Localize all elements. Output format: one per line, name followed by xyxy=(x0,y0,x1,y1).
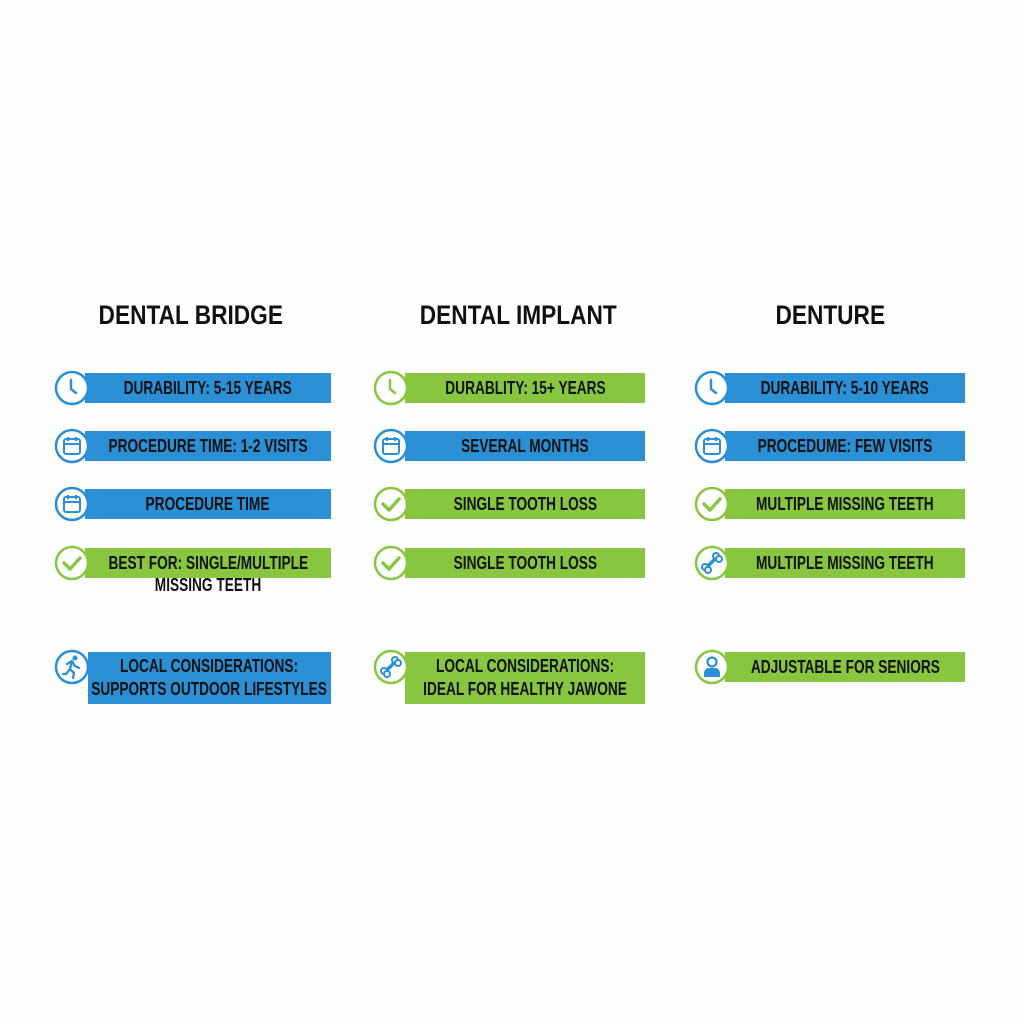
icon: calendar xyxy=(54,428,87,464)
column 3 item: multiple missing teeth xyxy=(694,486,965,522)
icon: check xyxy=(694,486,727,522)
column 1 item: best for: MISSING TEETH xyxy=(155,575,261,595)
column 1 item: procedure time: PROCEDURE TIME xyxy=(146,494,270,514)
icon: bone xyxy=(374,650,406,684)
column 1 item: best for: BEST FOR: SINGLE/MULTIPLE xyxy=(108,552,308,572)
icon: calendar xyxy=(374,428,406,464)
column 2 item: durability xyxy=(374,370,645,406)
column 3 item: procedure xyxy=(694,428,965,464)
icon: bone xyxy=(694,546,727,580)
column 3 item: durability: DURABILITY: 5-10 YEARS xyxy=(761,378,929,398)
column 2 item: single tooth loss 2: SINGLE TOOTH LOSS xyxy=(453,552,597,572)
column 2 item: single tooth loss xyxy=(374,486,645,522)
column 1 item: procedure time xyxy=(54,486,331,522)
icon: person xyxy=(694,650,727,684)
icon: runner xyxy=(54,650,88,684)
column 3 item: adjustable for seniors: ADJUSTABLE FOR SENIORS xyxy=(750,656,940,676)
column 2 item: durability: DURABLITY: 15+ YEARS xyxy=(445,378,605,398)
icon: check xyxy=(54,546,87,580)
column 2 item: local considerations: LOCAL CONSIDERATIONS: xyxy=(436,656,614,676)
column 3 item: adjustable for seniors xyxy=(694,650,965,684)
column 2 item: several months: SEVERAL MONTHS xyxy=(461,436,589,456)
column 1 item: local considerations: LOCAL CONSIDERATIONS: xyxy=(120,656,299,676)
column 1 item: durability xyxy=(54,370,331,406)
column 1 item: procedure time visits: PROCEDURE TIME: 1-2 VISITS xyxy=(108,436,308,456)
icon: check xyxy=(374,546,406,580)
icon: calendar xyxy=(54,486,87,522)
column 3 item: multiple missing teeth 2 xyxy=(694,546,965,580)
column 3 item: multiple missing teeth: MULTIPLE MISSING TEETH xyxy=(756,494,934,514)
column 2 item: local considerations: IDEAL FOR HEALTHY JAWONE xyxy=(423,679,627,699)
icon: check xyxy=(374,486,406,522)
column 2 item: single tooth loss: SINGLE TOOTH LOSS xyxy=(453,494,597,514)
column 1 item: local considerations xyxy=(54,650,331,704)
column 2 item: several months xyxy=(374,428,645,464)
heading: dental implant: DENTAL IMPLANT xyxy=(420,300,616,330)
column 1 item: procedure time visits xyxy=(54,428,331,464)
icon: clock xyxy=(374,370,406,406)
icon: clock xyxy=(694,370,727,406)
column 1 item: best for xyxy=(54,546,331,595)
column 2 item: single tooth loss 2 xyxy=(374,546,645,580)
column 2 item: local considerations xyxy=(374,650,645,704)
heading: denture: DENTURE xyxy=(775,300,885,330)
icon: clock xyxy=(54,370,87,406)
column 3 item: multiple missing teeth 2: MULTIPLE MISSING TEETH xyxy=(756,552,934,572)
column 1 item: local considerations: SUPPORTS OUTDOOR LIFESTYLES xyxy=(92,679,327,699)
column 1 item: durability: DURABILITY: 5-15 YEARS xyxy=(124,378,292,398)
column 3 item: procedure: PROCEDUME: FEW VISITS xyxy=(758,436,932,456)
icon: calendar xyxy=(694,428,727,464)
heading: dental bridge: DENTAL BRIDGE xyxy=(99,300,283,330)
column 3 item: durability xyxy=(694,370,965,406)
